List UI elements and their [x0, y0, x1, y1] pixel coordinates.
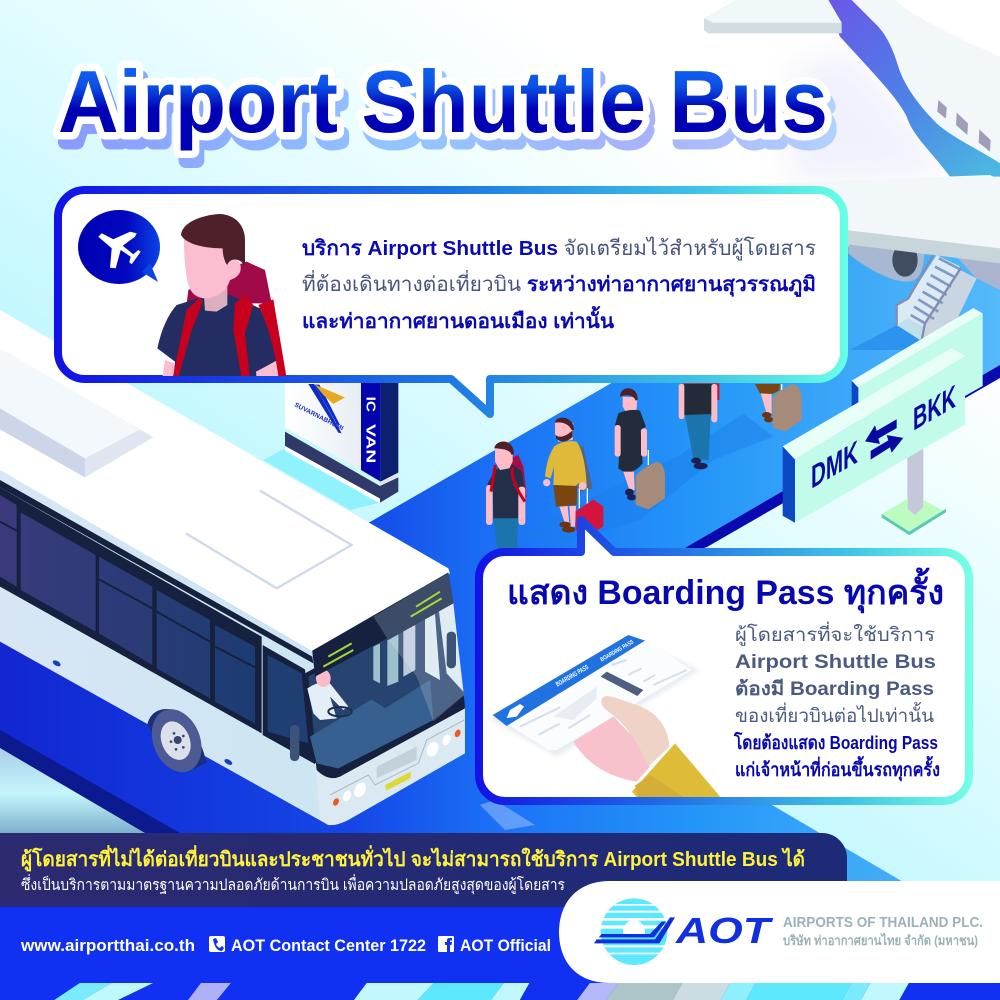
safety line: ซึ่งเป็นบริการตามมาตรฐานความปลอดภัยด้านการบิน เพื่อความปลอดภัยสูงสุดของผู้โดยสาร [21, 874, 565, 895]
plane windows [937, 100, 991, 152]
sign base [882, 498, 946, 535]
haze under tail [790, 50, 950, 182]
body text: ผู้โดยสารที่จะใช้บริการ [735, 621, 935, 646]
AOT wordmark: AOT [675, 910, 774, 951]
destination header [312, 572, 453, 677]
body text: ของเที่ยวบินต่อไปเท่านั้น [735, 702, 934, 727]
fuselage [852, 0, 1000, 177]
front panel [783, 348, 965, 523]
sign face [285, 380, 361, 470]
exchange arrows [865, 419, 903, 460]
boarding pass illustration: BOARDING PASS [555, 664, 590, 688]
passenger with shorts and suitcase [755, 384, 802, 432]
body text: Airport Shuttle Bus [735, 652, 936, 673]
engine [848, 240, 925, 282]
airplane [704, 0, 1000, 350]
notice banner [0, 833, 847, 907]
Suvarnabhumi sign [263, 380, 398, 510]
windows [0, 495, 255, 723]
airstairs [897, 255, 977, 343]
rear panel [852, 308, 983, 456]
fuselage stripe [823, 0, 1000, 177]
kerb [0, 730, 180, 833]
AOT logo panel [559, 881, 1000, 983]
front face [315, 707, 465, 825]
base band [285, 432, 380, 499]
icon: plane speech bubble [78, 210, 160, 284]
windshield [305, 593, 465, 778]
Suvarnabhumi sign: VAN [363, 424, 378, 463]
bubble outline [58, 190, 844, 414]
driver [307, 670, 352, 720]
reflection [388, 603, 464, 722]
tailplane [704, 0, 842, 33]
dark side [381, 380, 398, 482]
roof unit [0, 348, 153, 477]
blue strip [361, 380, 381, 482]
heading: แสดง Boarding Pass ทุกครั้ง [507, 567, 944, 614]
boarding pass illustration [490, 635, 721, 797]
facebook name: AOT Official [460, 937, 551, 955]
company name: AIRPORTS OF THAILAND PLC. [783, 914, 983, 931]
lower plane group [720, 175, 1000, 350]
title fill: Airport Shuttle Bus [58, 52, 828, 151]
roof hatch [186, 491, 352, 588]
info bubble [58, 190, 844, 414]
pole [907, 449, 923, 515]
roof [0, 310, 450, 652]
wing [720, 175, 1000, 263]
headlights [332, 729, 462, 807]
info text: ที่ต้องเดินทางต่อเที่ยวบิน ระหว่างท่าอากาศยานสุวรรณภูมิ [302, 270, 816, 298]
title shadow: Airport Shuttle Bus [63, 62, 833, 161]
passenger in jeans [679, 383, 719, 469]
lower left ground [0, 730, 180, 835]
contact bar [20, 936, 551, 955]
BKK label: BKK [913, 378, 956, 438]
road markings [480, 800, 535, 830]
far wing root [957, 257, 1000, 290]
window frame [0, 487, 262, 733]
logo wings [308, 384, 345, 433]
footer band [0, 907, 620, 1000]
upper fuselage group [823, 0, 1000, 177]
warning line: ผู้โดยสารที่ไม่ได้ต่อเที่ยวบินและประชาชนทั่วไป จะไม่สามารถใช้บริการ Airport Shuttle Bus ได้ [21, 844, 805, 873]
icon: phone [209, 936, 225, 952]
roof gutter [0, 480, 313, 663]
door [263, 645, 317, 765]
bottom colour stripes [0, 983, 1000, 1000]
passenger in yellow [543, 418, 603, 537]
emphasised text [733, 731, 940, 782]
AOT emblem [594, 898, 675, 965]
info text: บริการ Airport Shuttle Bus จัดเตรียมไว้สำหรับผู้โดยสาร [302, 236, 816, 261]
strip lettering: IC [363, 397, 378, 412]
body text [735, 621, 936, 727]
bubble outline [479, 520, 969, 801]
boarding pass illustration: BOARDING PASS [600, 640, 635, 663]
front grille [330, 720, 464, 795]
bus [0, 310, 465, 825]
windshield panels [373, 603, 463, 692]
luggage latches [52, 659, 233, 766]
road [0, 240, 1000, 910]
passengers [486, 383, 802, 548]
ground under stairs [850, 325, 923, 350]
wheel [143, 702, 211, 780]
contact center: AOT Contact Center 1722 [231, 937, 426, 955]
title [58, 52, 833, 161]
shadows [517, 413, 773, 543]
mirrors [290, 632, 456, 761]
emphasised text: แก่เจ้าหน้าที่ก่อนขึ้นรถทุกครั้ง [735, 756, 940, 782]
icon: facebook [438, 936, 454, 952]
dashboard [310, 680, 433, 768]
emphasised text: โดยต้องแสดง Boarding Pass [733, 731, 938, 753]
title outline: Airport Shuttle Bus [58, 52, 828, 151]
DMK label: DMK [811, 434, 858, 496]
info text [302, 236, 816, 333]
info text: และท่าอากาศยานดอนเมือง เท่านั้น [302, 305, 614, 333]
side body [0, 470, 328, 825]
website: www.airportthai.co.th [20, 937, 195, 955]
passenger with backpack [486, 442, 527, 548]
boarding pass bubble [479, 520, 969, 801]
body text: ต้องมี Boarding Pass [735, 678, 934, 700]
airport name: SUVARNABHUMI [293, 402, 345, 432]
passenger in black dress [615, 388, 665, 509]
direction sign DMK BKK [783, 308, 983, 535]
traveller illustration [157, 214, 287, 378]
road edge stripe [640, 365, 1000, 574]
shadow [263, 448, 380, 510]
